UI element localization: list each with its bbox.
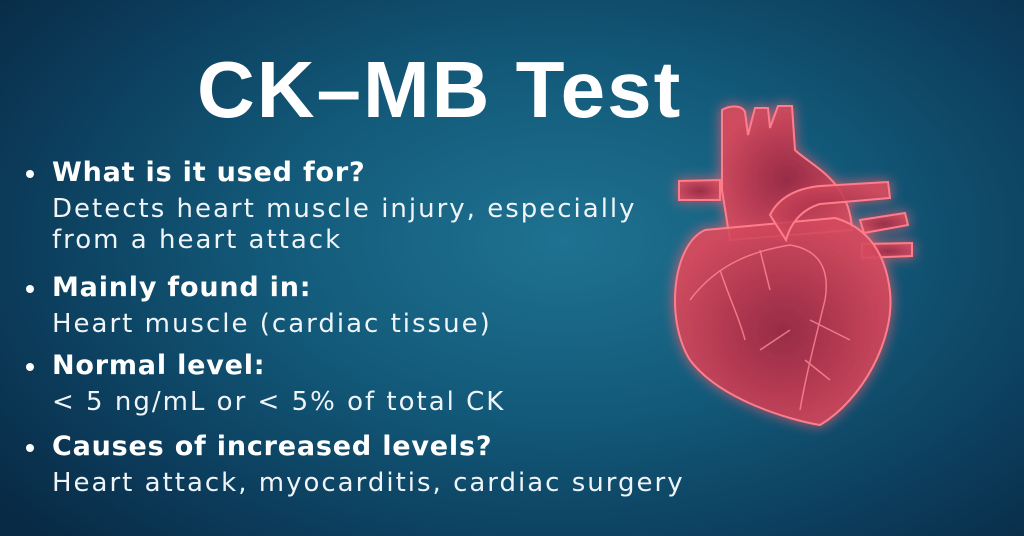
bullet: used for (26, 157, 637, 255)
bullet: normal level: Normal level: (52, 350, 265, 381)
bullet: used for: What is it used for? (52, 157, 365, 188)
title: CK–MB Test (197, 45, 682, 134)
bullet: causes: Causes of increased levels? (52, 431, 492, 462)
bullet: found in (26, 272, 492, 339)
bullet: causes (26, 431, 685, 498)
bullet: found in: Mainly found in: (52, 272, 311, 303)
bullet: normal level (26, 350, 505, 417)
bullet: normal level: < 5 ng/mL or < 5% of total CK (52, 387, 505, 417)
bullet: used for: Detects heart muscle injury, especially (52, 194, 637, 224)
bullet: found in: Heart muscle (cardiac tissue) (52, 309, 492, 339)
bullet: causes: Heart attack, myocarditis, cardiac surgery (52, 468, 685, 498)
bullet: used for: from a heart attack (52, 225, 342, 255)
